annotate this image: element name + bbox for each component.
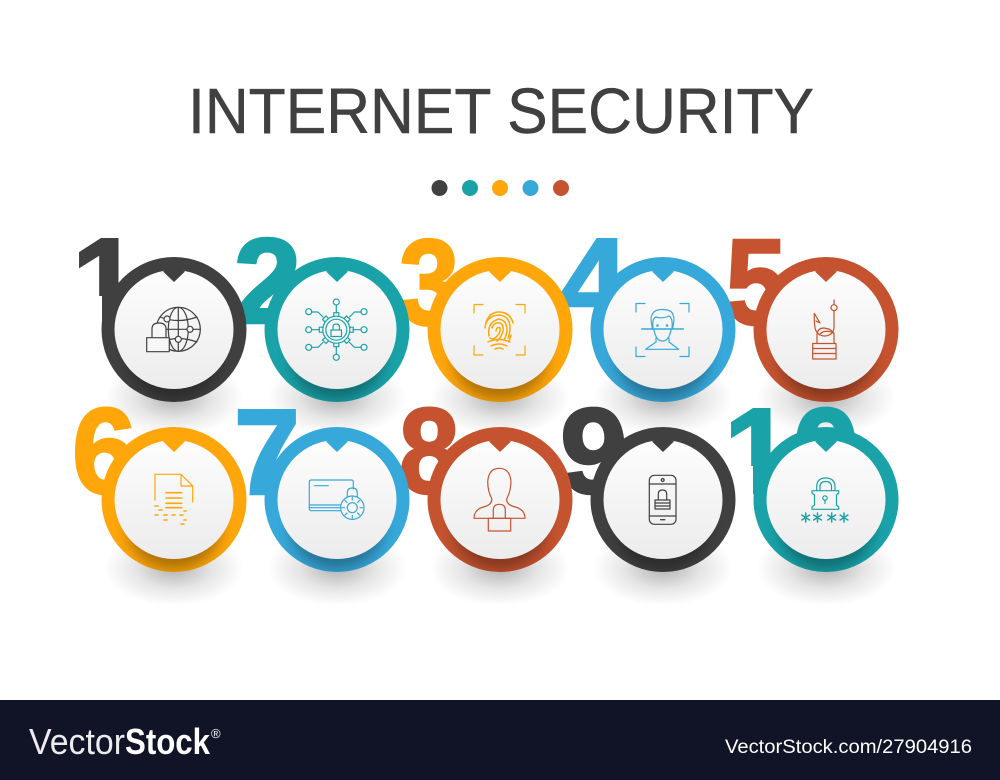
badge 7 xyxy=(264,427,410,572)
badge 10 xyxy=(754,427,898,572)
footer logo bold: Stock xyxy=(125,721,211,762)
icon: credit card with lock xyxy=(309,480,364,519)
number 7: 7 xyxy=(234,384,300,520)
number 1: 1 xyxy=(72,213,140,349)
icon: phishing hook xyxy=(813,300,837,359)
badge 3 xyxy=(428,257,572,402)
badge 9 xyxy=(590,427,736,572)
registered mark: ® xyxy=(211,726,221,741)
icon: globe with padlock xyxy=(147,307,200,352)
icon: fingerprint scan xyxy=(474,304,525,355)
number 3: 3 xyxy=(399,214,459,350)
title: INTERNET SECURITY xyxy=(188,75,814,147)
badge 8 xyxy=(428,427,572,572)
number 2: 2 xyxy=(234,213,301,349)
number 5: 5 xyxy=(726,214,787,350)
footer id: VectorStock.com/27904916 xyxy=(725,737,972,758)
number 4: 4 xyxy=(560,213,628,349)
colour dots xyxy=(432,180,569,196)
icon: shredded document xyxy=(155,474,193,524)
number 8: 8 xyxy=(399,383,459,519)
icon: padlock with password xyxy=(802,478,848,522)
badge 5 xyxy=(754,257,898,402)
number 10: 10 xyxy=(724,383,860,519)
badge 2 xyxy=(264,257,410,402)
badge 4 xyxy=(590,257,736,402)
number 6: 6 xyxy=(72,383,136,520)
icon: face recognition xyxy=(636,304,689,356)
icon: smartphone lock xyxy=(649,475,676,524)
icon: user with lock xyxy=(474,468,525,531)
footer bar xyxy=(0,700,1000,780)
footer logo: Vector xyxy=(29,721,125,762)
badge 1 xyxy=(102,257,246,402)
badge 6 xyxy=(102,427,246,572)
icon: gear network lock xyxy=(306,299,367,360)
number 9: 9 xyxy=(560,383,628,519)
